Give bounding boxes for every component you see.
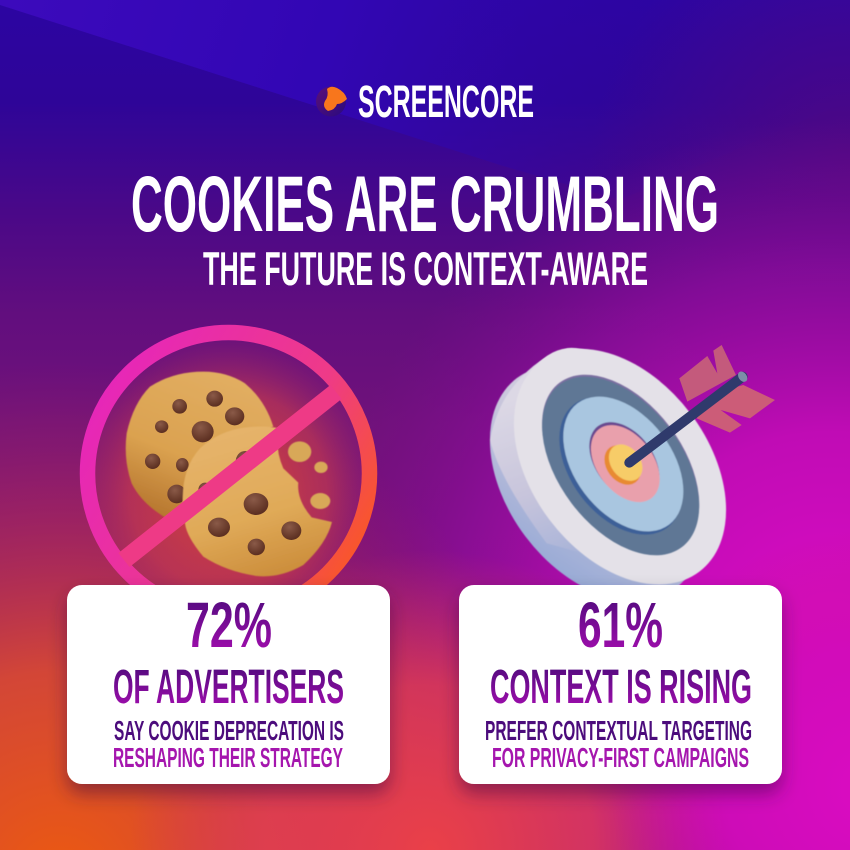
logo wordmark: SCREENCORE [358, 76, 534, 127]
target rings [510, 346, 731, 584]
card text line 1: SAY COOKIE DEPRECATION IS [114, 715, 344, 746]
card: 72% of advertisers [67, 585, 390, 784]
stat: 61%: 61% [578, 589, 663, 661]
logo [316, 76, 534, 127]
stat: 72%: 72% [186, 589, 272, 661]
cookie crumbs [288, 441, 330, 509]
icon: target with arrow [446, 308, 775, 642]
card text line 2: RESHAPING THEIR STRATEGY [113, 742, 343, 773]
target face [470, 308, 770, 625]
prohibition slash [124, 392, 336, 560]
prohibition ring [88, 332, 370, 614]
cookie: back [126, 372, 273, 517]
icon: logo mark [316, 86, 347, 116]
cookie: bitten front [183, 427, 332, 576]
target body [446, 325, 746, 642]
arrow [629, 345, 775, 463]
card: 61% context is rising [459, 585, 782, 784]
icon: crossed-out cookies [83, 332, 373, 625]
card heading: OF ADVERTISERS [113, 661, 344, 714]
